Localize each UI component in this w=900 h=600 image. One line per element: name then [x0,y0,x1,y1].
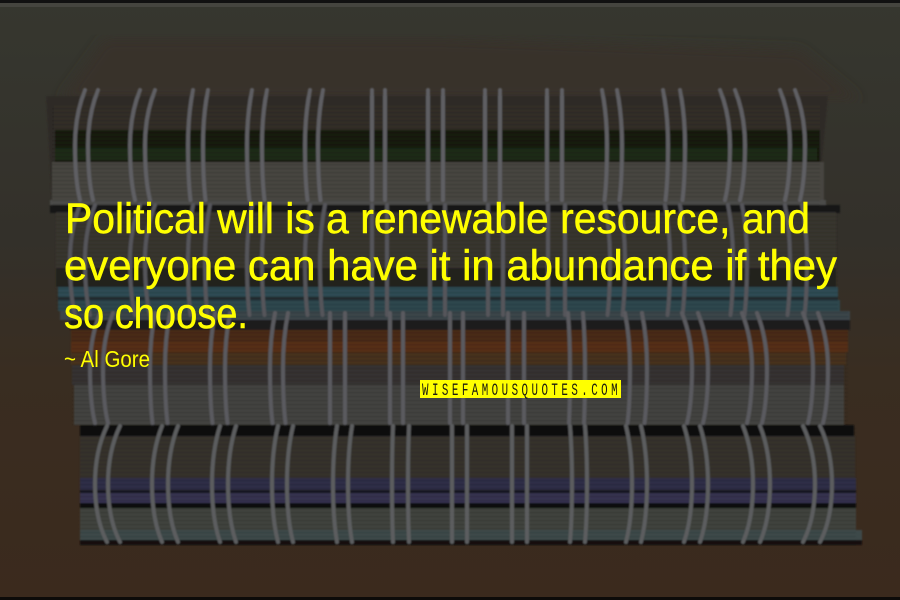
notebook 1 [46,96,828,206]
spiral rings: notebook 1 [75,90,805,200]
page lines [46,100,861,546]
notebook 2 [50,205,850,320]
quote text: everyone can have it in abundance if they [64,242,837,290]
attribution: ~ Al Gore [64,346,150,372]
notebook 4 [80,425,862,545]
stack of spiral notebooks [46,90,862,546]
watermark badge: WISEFAMOUSQUOTES.COM [422,382,621,401]
spiral rings: notebook 4 [95,426,832,542]
quote text: Political will is a renewable resource, and [65,195,810,243]
quote text [64,195,837,338]
quote text: so choose. [64,290,248,338]
spiral rings: notebook 2 [70,205,807,315]
notebook 3 [70,320,850,425]
spiral rings: notebook 3 [90,313,828,423]
